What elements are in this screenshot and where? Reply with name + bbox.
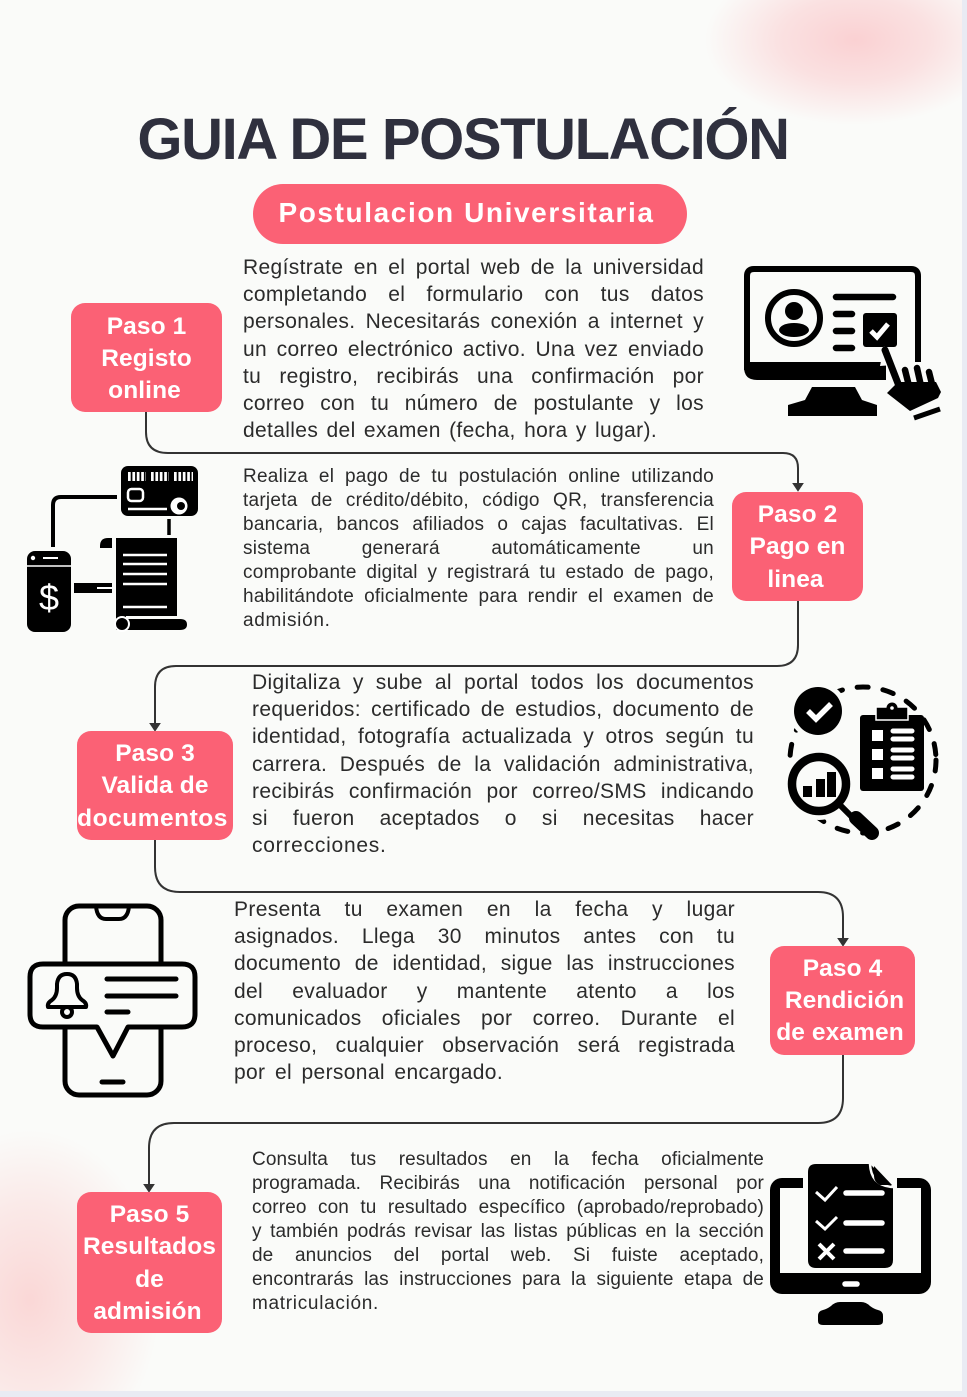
step 2 text xyxy=(243,466,714,631)
step 3 text: recibirás confirmación por correo/SMS indicando xyxy=(252,780,754,803)
step 5 text: de anuncios del portal web. Si fuiste aceptado, xyxy=(252,1245,764,1266)
step 4 text: asignados. Llega 30 minutos antes con tu xyxy=(234,925,735,948)
step 4 label: Paso 4 xyxy=(803,955,882,982)
step 4 text: documento de identidad, sigue las instrucciones xyxy=(234,952,735,975)
step 4 text: comunicados oficiales por correo. Durante el xyxy=(234,1007,735,1030)
icon: monitor with results checklist xyxy=(770,1164,931,1325)
step 2 label: Pago en xyxy=(750,533,846,560)
step 5 text: programada. Recibirás una notificación personal por xyxy=(252,1173,764,1194)
step 1 text xyxy=(243,256,704,442)
step 5 text: Consulta tus resultados en la fecha oficialmente xyxy=(252,1149,764,1170)
step 1 text: un correo electrónico activo. Una vez enviado xyxy=(243,338,704,361)
step 5 label: Paso 5 xyxy=(110,1201,189,1228)
step 4 label: de examen xyxy=(776,1019,904,1046)
step 1 text: correo con tu número de postulante y los xyxy=(243,392,704,415)
step 2 text: sistema generará automáticamente un xyxy=(243,538,714,559)
step 2 text: Realiza el pago de tu postulación online utilizando xyxy=(243,466,714,487)
step 2 label xyxy=(732,492,863,601)
step 3 text: si fueron aceptados o si necesitas hacer xyxy=(252,807,754,830)
step 2 text: admisión. xyxy=(243,610,331,631)
icon: payment card, phone and receipt: $ xyxy=(39,577,59,618)
step 2 text: bancaria, bancos afiliados o cajas facultativas. El xyxy=(243,514,714,535)
step 2 text: tarjeta de crédito/débito, código QR, transferencia xyxy=(243,490,714,511)
step 3 text xyxy=(252,671,754,857)
step 3 text: carrera. Después de la validación administrativa, xyxy=(252,753,754,776)
step 4 text: del evaluador y mantente atento a los xyxy=(234,980,735,1003)
step 5 text: correo con tu resultado específico (aprobado/reprobado) xyxy=(252,1197,764,1218)
step 5 label xyxy=(77,1192,222,1333)
step 4 text: proceso, cualquier observación será registrada xyxy=(234,1034,735,1057)
step 1 text: personales. Necesitarás conexión a internet y xyxy=(243,310,704,333)
step 2 text: comprobante digital y registrará tu estado de pago, xyxy=(243,562,714,583)
step 4 text: Presenta tu examen en la fecha y lugar xyxy=(234,898,735,921)
step 2 text: habilitándote oficialmente para rendir el examen de xyxy=(243,586,714,607)
icon: payment card, phone and receipt xyxy=(27,466,198,632)
step 1 text: Regístrate en el portal web de la universidad xyxy=(243,256,704,279)
subtitle pill: Postulacion Universitaria xyxy=(278,197,655,228)
step 2 label: Paso 2 xyxy=(758,501,837,528)
step 5 label: de xyxy=(135,1266,164,1293)
step 1 text: tu registro, recibirás una confirmación por xyxy=(243,365,704,388)
step 3 text: Digitaliza y sube al portal todos los documentos xyxy=(252,671,754,694)
subtitle pill xyxy=(253,184,687,244)
step 5 text: encontrarás las instrucciones para la siguiente etapa de xyxy=(252,1269,764,1290)
step 1 label xyxy=(71,303,222,412)
step 3 label: Paso 3 xyxy=(115,740,195,767)
icon: phone with notification bell xyxy=(28,904,198,1098)
step 3 text: identidad, fotografía actualizada y otros según tu xyxy=(252,725,754,748)
step 3 text: correcciones. xyxy=(252,834,387,857)
step 4 text: por el personal encargado. xyxy=(234,1061,503,1084)
icon: checklist, magnifier and dashed circle xyxy=(788,684,938,840)
step 5 text xyxy=(252,1149,764,1314)
step 1 label: Registo xyxy=(101,345,192,372)
step 4 text xyxy=(234,898,735,1084)
step 1 text: completando el formulario con tus datos xyxy=(243,283,704,306)
icon: monitor with profile and pointing hand xyxy=(744,266,941,420)
step 3 text: requeridos: certificado de estudios, documento de xyxy=(252,698,754,721)
step 5 label: admisión xyxy=(93,1298,202,1325)
step 1 text: detalles del examen (fecha, hora y lugar). xyxy=(243,419,657,442)
step 4 label: Rendición xyxy=(785,987,904,1014)
step 2 label: linea xyxy=(767,566,824,593)
step 5 text: y también podrás revisar las listas públicas en la sección xyxy=(252,1221,764,1242)
step 5 text: matriculación. xyxy=(252,1293,379,1314)
step 3 label: Valida de xyxy=(101,772,209,799)
step 3 label xyxy=(77,731,233,840)
step 1 label: Paso 1 xyxy=(107,313,186,340)
title: GUIA DE POSTULACIÓN xyxy=(137,107,789,172)
step 4 label xyxy=(770,946,915,1055)
step 3 label: documentos xyxy=(77,805,228,832)
step 1 label: online xyxy=(108,377,181,404)
step 5 label: Resultados xyxy=(83,1233,216,1260)
